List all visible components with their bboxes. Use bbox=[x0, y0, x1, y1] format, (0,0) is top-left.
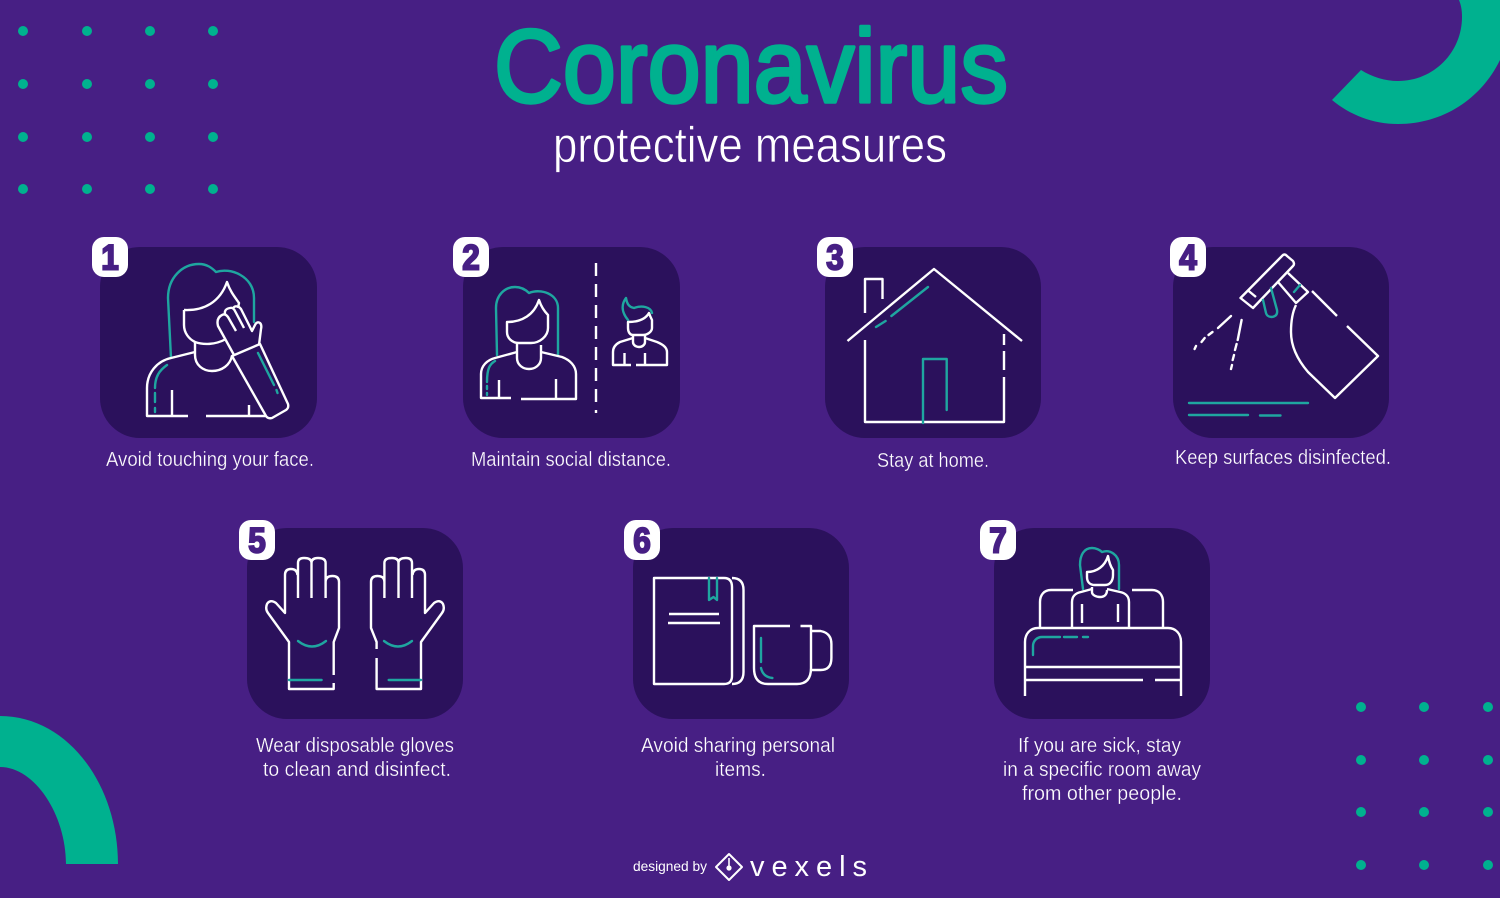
decorative arc: bottom left bbox=[0, 716, 118, 864]
icon: woman bbox=[481, 287, 576, 399]
footer: vexels credit bbox=[633, 851, 867, 883]
panel 5: gloves bbox=[239, 520, 463, 781]
caption 7: in a specific room away bbox=[1003, 759, 1201, 781]
icon: left glove bbox=[266, 558, 339, 689]
panel 3: stay at home bbox=[817, 237, 1041, 472]
badge 5 bbox=[239, 520, 275, 561]
caption 3: Stay at home. bbox=[877, 450, 989, 472]
caption 6: items. bbox=[715, 759, 766, 781]
footer: vexels credit: vexels bbox=[750, 851, 867, 883]
decorative arc: top right bbox=[1332, 0, 1500, 124]
caption 1: Avoid touching your face. bbox=[106, 449, 314, 471]
badge 1 bbox=[92, 237, 128, 278]
badge 2: 2 bbox=[462, 239, 480, 278]
badge 1: 1 bbox=[101, 239, 119, 278]
badge 4 bbox=[1170, 237, 1206, 278]
icon: man bbox=[613, 298, 667, 365]
badge 2 bbox=[453, 237, 489, 278]
panel 7: stay in a room bbox=[980, 520, 1210, 805]
icon: spray bottle bbox=[1189, 254, 1378, 416]
caption 5: to clean and disinfect. bbox=[263, 759, 451, 781]
dot grid: top left bbox=[18, 26, 218, 194]
badge 3 bbox=[817, 237, 853, 278]
caption 2: Maintain social distance. bbox=[471, 449, 671, 471]
panel 2: social distance bbox=[453, 237, 680, 471]
caption 7 bbox=[1003, 735, 1201, 805]
icon: woman touching face bbox=[147, 264, 288, 418]
panel 6: personal items bbox=[624, 520, 849, 781]
panel 4: disinfect surfaces bbox=[1170, 237, 1391, 469]
caption 6 bbox=[641, 735, 835, 781]
badge 6: 6 bbox=[633, 522, 651, 561]
icon: house bbox=[848, 269, 1022, 423]
caption 5: Wear disposable gloves bbox=[256, 735, 454, 757]
badge 6 bbox=[624, 520, 660, 561]
icon: mug bbox=[754, 626, 831, 684]
caption 5 bbox=[256, 735, 454, 781]
icon: person in bed bbox=[1025, 548, 1181, 696]
caption 6: Avoid sharing personal bbox=[641, 735, 835, 757]
icon: right glove bbox=[371, 558, 444, 689]
badge 4: 4 bbox=[1179, 239, 1197, 278]
caption 4: Keep surfaces disinfected. bbox=[1175, 447, 1391, 469]
icon: book bbox=[654, 578, 744, 684]
subtitle: protective measures bbox=[553, 117, 947, 173]
caption 7: If you are sick, stay bbox=[1018, 735, 1181, 757]
badge 7: 7 bbox=[989, 522, 1007, 561]
badge 5: 5 bbox=[248, 522, 266, 561]
badge 7 bbox=[980, 520, 1016, 561]
panel 1: avoid touching face bbox=[92, 237, 317, 471]
icon: vexels diamond bbox=[716, 854, 742, 880]
divider: dashed line bbox=[595, 263, 597, 413]
title: Coronavirus bbox=[494, 9, 1008, 125]
dot grid: bottom right bbox=[1356, 702, 1493, 870]
footer: vexels credit: designed by bbox=[633, 858, 707, 874]
badge 3: 3 bbox=[826, 239, 844, 278]
caption 7: from other people. bbox=[1022, 783, 1182, 805]
